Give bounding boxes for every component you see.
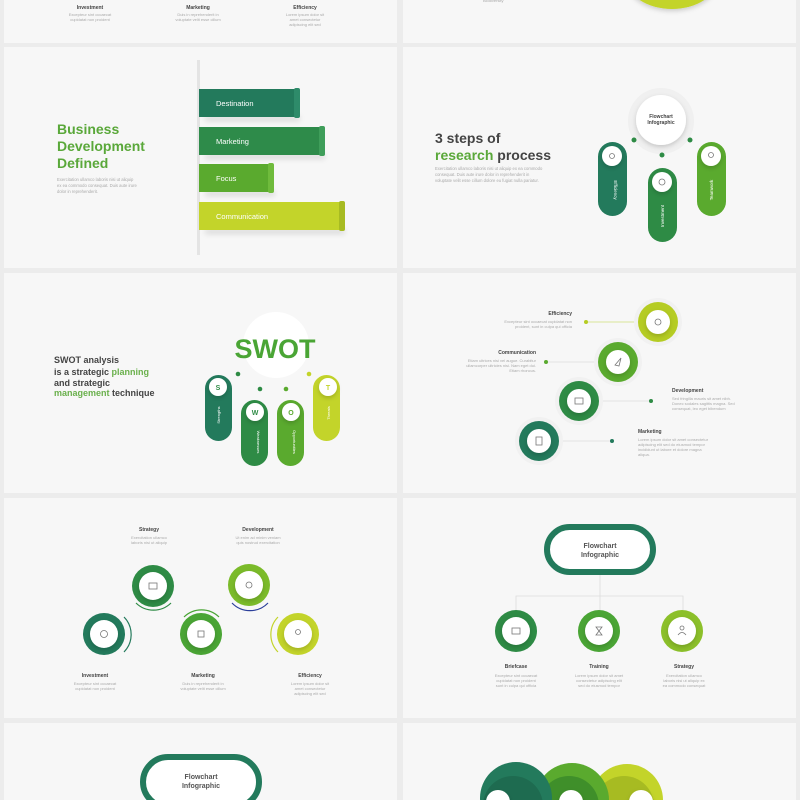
panel: flowchart tree: Briefcase xyxy=(505,664,527,670)
text block: Exercitation ullamco laboris nisi ut aliquip xyxy=(57,177,134,182)
top-left partial slide labels: cupidatat non proident xyxy=(70,17,111,22)
title xyxy=(57,121,145,171)
arcs xyxy=(124,603,278,652)
panel: business development xyxy=(57,60,345,255)
panel: bottom-right circles xyxy=(480,762,663,800)
step labels: proident, sunt in culpa qui officia xyxy=(515,324,573,329)
top-right partial: lime circle xyxy=(483,0,718,9)
step labels: Donec sodales sagittis magna. Sed xyxy=(672,401,735,406)
panel: flowchart tree xyxy=(495,527,706,688)
panel: bottom-left flowchart pill: Infographic xyxy=(182,783,220,790)
text block xyxy=(54,355,155,398)
panel: 3 steps research: Exercitation ullamco laboris nisi ut aliquip ex ea commodo xyxy=(435,166,543,171)
top-left partial slide labels: Duis in reprehenderit in xyxy=(177,12,219,17)
pill O: Opportunities xyxy=(292,430,297,454)
pill T: T xyxy=(326,385,331,392)
step labels: Development xyxy=(672,388,704,394)
labels xyxy=(74,527,330,696)
panel: bottom-left flowchart pill xyxy=(143,757,259,800)
heading xyxy=(435,130,551,163)
SWOT heading: SWOT xyxy=(234,334,316,364)
labels: laboris nisi ut aliquip xyxy=(131,540,168,545)
ribbons: Marketing xyxy=(216,137,249,146)
text block xyxy=(57,177,138,194)
labels: Marketing xyxy=(191,673,215,679)
ribbons: Communication xyxy=(216,212,268,221)
labels: adipiscing elit sed xyxy=(294,691,326,696)
text block: dolor in reprehenderit. xyxy=(57,189,98,194)
labels: Investment xyxy=(82,673,109,679)
step labels: Lorem ipsum dolor sit amet consectetur xyxy=(638,437,709,442)
panel: flowchart tree: Lorem ipsum dolor sit amet xyxy=(575,673,624,678)
top-left partial slide labels: Lorem ipsum dolor sit xyxy=(286,12,325,17)
labels: Exercitation ullamco xyxy=(131,535,168,540)
center circle xyxy=(636,95,686,145)
top-left partial slide labels: voluptate velit esse cillum xyxy=(175,17,221,22)
ribbons: Focus xyxy=(216,174,237,183)
labels: Strategy xyxy=(139,527,159,533)
title: Development xyxy=(57,138,145,154)
panel: flowchart tree: Exercitation ullamco xyxy=(666,673,703,678)
title: Defined xyxy=(57,155,108,171)
panel: flowchart tree: consectetur adipiscing elit xyxy=(576,678,623,683)
panel: 3 steps research xyxy=(435,88,726,242)
labels: amet consectetur xyxy=(295,686,326,691)
pill O xyxy=(277,400,304,466)
labels: Development xyxy=(242,527,274,533)
pill O: O xyxy=(288,410,294,417)
step labels: Communication xyxy=(498,350,536,356)
text block: ex ea commodo consequat. Duis aute irure xyxy=(57,183,138,188)
panel: flowchart tree: Excepteur sint occaecat xyxy=(495,673,538,678)
step circles xyxy=(515,298,682,465)
step labels: Excepteur sint occaecat cupidatat non xyxy=(504,319,572,324)
text block: management technique xyxy=(54,388,155,398)
pill investment xyxy=(648,168,677,242)
step labels xyxy=(466,311,735,457)
panel: five circles xyxy=(74,527,330,696)
top-left partial slide labels: adipiscing elit sed xyxy=(289,22,321,27)
step labels: adipiscing elit sed do eiusmod tempor xyxy=(638,442,706,447)
text block: is a strategic planning xyxy=(54,367,149,377)
pill heading: Infographic xyxy=(581,552,619,559)
step labels: Etiam rhoncus. xyxy=(509,368,536,373)
heading: research process xyxy=(435,147,551,163)
text block: SWOT analysis xyxy=(54,355,119,365)
circles xyxy=(83,564,319,655)
labels: cupidatat non proident xyxy=(75,686,116,691)
labels: Ut enim ad minim veniam xyxy=(235,535,281,540)
panel: bottom-left flowchart pill: Flowchart xyxy=(184,774,218,781)
panel: flowchart tree: cupidatat non proident xyxy=(496,678,537,683)
top-left partial slide labels: Investment xyxy=(77,5,104,11)
step labels: Sed fringilla mauris sit amet nibh. xyxy=(672,396,731,401)
center circle: Flowchart xyxy=(649,114,673,120)
ribbons: Destination xyxy=(216,99,254,108)
heading: 3 steps of xyxy=(435,130,501,146)
pill heading: Flowchart xyxy=(583,543,617,550)
center circle: Infographic xyxy=(647,120,675,126)
top-left partial slide labels: Efficiency xyxy=(293,5,317,11)
step labels: consequat, leo eget bibendum xyxy=(672,406,726,411)
top-left partial slide labels: Excepteur sint occaecat xyxy=(69,12,112,17)
labels: Excepteur sint occaecat xyxy=(74,681,117,686)
step labels: Efficiency xyxy=(548,311,572,317)
pill S: Strengths xyxy=(216,406,221,424)
pill teamwork xyxy=(697,142,726,216)
top-left partial slide labels: Marketing xyxy=(186,5,210,11)
labels: Lorem ipsum dolor sit xyxy=(291,681,330,686)
labels: Duis in reprehenderit in xyxy=(182,681,224,686)
panel: flowchart tree: sed do eiusmod tempor xyxy=(578,683,621,688)
panel: 3 steps research: consequat. Duis aute irure dolor in reprehenderit in xyxy=(435,172,530,177)
text block: and strategic xyxy=(54,378,110,388)
ribbons xyxy=(199,88,345,231)
pill S: S xyxy=(216,385,221,392)
step labels: Etiam ultrices nisi vel augue. Curabitur xyxy=(468,358,537,363)
labels: Efficiency xyxy=(298,673,322,679)
panel: flowchart tree: Strategy xyxy=(674,664,694,670)
step labels: ullamcorper ultricies nisi. Nam eget dui. xyxy=(466,363,536,368)
pill teamwork: Teamwork xyxy=(709,179,714,200)
labels: voluptate velit esse cillum xyxy=(180,686,226,691)
tree circles xyxy=(495,610,703,652)
pill T xyxy=(313,375,340,441)
pill W: W xyxy=(252,410,259,417)
pill W xyxy=(241,400,268,466)
top-left partial slide labels: amet consectetur xyxy=(290,17,321,22)
panel: flowchart tree: laboris nisi ut aliquip ex xyxy=(663,678,705,683)
pill efficiency xyxy=(598,142,627,216)
panel: SWOT xyxy=(54,312,340,466)
panel: flowchart tree: ea commodo consequat xyxy=(663,683,706,688)
panel: flowchart tree: sunt in culpa qui officia xyxy=(496,683,537,688)
step labels: aliqua. xyxy=(638,452,650,457)
labels: quis nostrud exercitation xyxy=(236,540,280,545)
title: Business xyxy=(57,121,119,137)
pill heading xyxy=(547,527,653,572)
panel: 3 steps research: voluptate velit esse cillum dolore eu fugiat nulla pariatur. xyxy=(435,178,539,183)
pill W: Weaknesses xyxy=(256,431,261,453)
top-left partial slide labels xyxy=(69,5,325,27)
step labels: Marketing xyxy=(638,429,662,435)
pill S xyxy=(205,375,232,441)
pill efficiency: Efficiency xyxy=(613,180,618,200)
pill T: Threats xyxy=(326,406,331,420)
step labels: incididunt ut labore et dolore magna xyxy=(638,447,702,452)
panel: flowchart tree: Training xyxy=(589,664,609,670)
pill investment: Investment xyxy=(660,204,665,227)
panel: diagonal steps xyxy=(466,298,735,465)
